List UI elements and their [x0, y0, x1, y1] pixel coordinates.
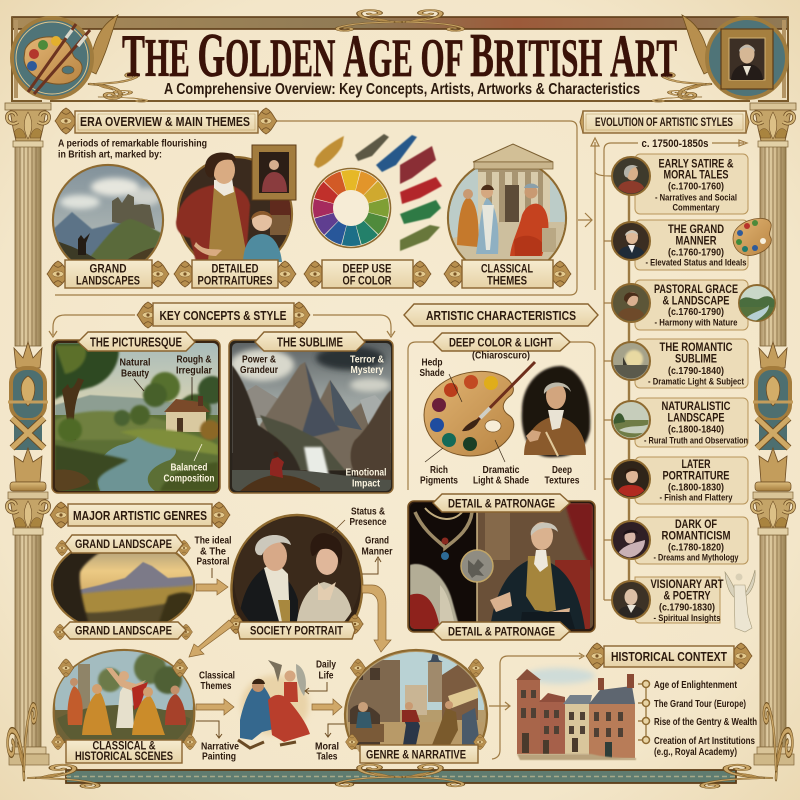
icon: left palette medallion: [12, 18, 92, 98]
heading: key concepts: [137, 302, 310, 328]
banner: the sublime: [255, 332, 365, 351]
style: early satire: EARLY SATIRE &: [658, 156, 734, 170]
annotation: emotional impact: [346, 468, 387, 490]
annotation: classical themes: [199, 670, 235, 692]
style: pastoral grace: - Harmony with Nature: [654, 318, 738, 328]
annotation: rough and irregular: Rough &: [176, 354, 212, 366]
style: dark of romanticism: DARK OF: [675, 517, 717, 531]
style: early satire: MORAL TALES: [664, 168, 729, 182]
style: romantic sublime: THE ROMANTIC: [660, 340, 733, 354]
style: grand manner: - Elevated Status and Ideals: [646, 258, 746, 268]
banner: deep use of color: OF COLOR: [342, 276, 392, 288]
style: later portraiture: PORTRAITURE: [662, 468, 730, 482]
annotation: ideal and pastoral: The ideal: [194, 536, 232, 546]
list: context timeline: Creation of Art Institutions: [654, 735, 755, 747]
banner: classical and historical scenes: [66, 740, 182, 763]
portrait: grand manner: [612, 222, 650, 260]
banner: grand landscapes: [47, 260, 169, 288]
style: romantic sublime: [635, 339, 748, 388]
arrow: portrait to genre: [362, 585, 391, 652]
annotation: power and grandeur: Grandeur: [240, 365, 278, 376]
style: naturalistic landscape: LANDSCAPE: [668, 410, 725, 424]
date range: c. 17500-1850s: [642, 138, 708, 150]
icon: framed portrait medallion: [707, 18, 787, 98]
annotation: narrative painting: Narrative: [201, 742, 239, 752]
banner: classical themes: CLASSICAL: [481, 264, 533, 276]
annotation: rich pigments: Pigments: [420, 476, 458, 486]
annotation: emotional impact: Emotional: [346, 468, 387, 478]
annotation: daily life: [305, 660, 336, 694]
style: grand manner: [635, 220, 748, 270]
list: context timeline: Rise of the Gentry & Wealth: [654, 716, 757, 728]
genre: society portrait: [228, 515, 363, 639]
heading: historical context: [586, 643, 752, 669]
list: context timeline: The Grand Tour (Europe): [654, 698, 746, 710]
style: grand manner: THE GRAND: [668, 222, 724, 236]
style: pastoral grace: PASTORAL GRACE: [654, 282, 738, 296]
annotation: rich pigments: Rich: [430, 465, 448, 476]
annotation: natural beauty: [120, 358, 151, 391]
annotation: hedp shade: [420, 358, 445, 379]
intro text: A periods of remarkable flourishing: [58, 138, 207, 150]
annotation: terror and mystery: Mystery: [350, 365, 384, 376]
style: visionary art: VISIONARY ART: [650, 577, 724, 591]
picture: the sublime: [229, 340, 393, 493]
vignette: naturalistic landscape: [612, 401, 650, 440]
style: naturalistic landscape: NATURALISTIC: [662, 399, 731, 413]
banner: the picturesque: THE PICTURESQUE: [90, 336, 182, 350]
style: pastoral grace: [635, 280, 748, 330]
annotation: ideal and pastoral: Pastoral: [196, 556, 230, 568]
banner: deep use of color: DEEP USE: [342, 264, 392, 276]
panel: evolution of artistic styles: [580, 111, 775, 632]
arrow: genre to context: [489, 702, 510, 710]
style: grand manner: (c.1760-1790): [668, 248, 724, 258]
annotation: dramatic light: Light & Shade: [473, 476, 529, 486]
annotation: power and grandeur: Power &: [242, 354, 276, 366]
annotation: power and grandeur: [240, 354, 278, 376]
portrait: dark of romanticism: [612, 521, 650, 559]
style: romantic sublime: (c.1790-1840): [668, 366, 724, 377]
banner: detailed portraitures: PORTRAITURES: [198, 276, 273, 288]
list: context timeline: [638, 679, 757, 758]
annotation: grand manner: Manner: [362, 546, 393, 558]
annotation: status and presence: Status &: [351, 506, 385, 518]
annotation: grand manner: Grand: [365, 536, 389, 546]
annotation: moral tales: Tales: [316, 752, 338, 762]
annotation: moral tales: [315, 724, 345, 762]
heading: era overview: [55, 108, 277, 134]
portrait: early satire: [612, 157, 650, 195]
annotation: terror and mystery: Terror &: [350, 354, 384, 366]
decorative frame top band: [12, 17, 788, 101]
portrait: artist: [522, 366, 590, 457]
annotation: balanced composition: Composition: [164, 474, 215, 484]
list: context timeline: (e.g., Royal Academy): [654, 746, 737, 758]
title: THE GOLDEN AGE OF BRITISH ART: [122, 22, 677, 90]
portrait: visionary art: [612, 581, 650, 619]
corner ornament: bottom right: [702, 705, 792, 788]
illustration: allegorical figures: [238, 660, 310, 748]
banner: detail and patronage bottom: DETAIL & PATRONAGE: [448, 624, 555, 638]
banner: grand landscape bottom: [62, 622, 186, 639]
intro text: in British art, marked by:: [58, 150, 162, 160]
arrow: era to evolution: [578, 213, 592, 227]
banner: society portrait: SOCIETY PORTRAIT: [250, 624, 344, 638]
corner ornament: bottom left: [8, 705, 98, 788]
illustration: georgian buildings: [516, 668, 636, 760]
heading: evolution: [580, 111, 749, 133]
heading: major artistic genres: [50, 502, 230, 528]
annotation: deep textures: Textures: [544, 476, 580, 486]
picture: the picturesque: [52, 340, 226, 493]
annotation: hedp shade: Shade: [420, 368, 445, 379]
banner: detailed portraitures: [174, 260, 296, 288]
arrow: portrait to classical: [189, 620, 234, 657]
style: romantic sublime: - Dramatic Light & Subject: [648, 376, 745, 388]
genre: classical and historical scenes: [51, 650, 197, 763]
style: romantic sublime: SUBLIME: [675, 352, 717, 366]
portrait: later portraiture: [612, 460, 650, 498]
paint strokes: [314, 134, 442, 251]
banner: detail and patronage bottom: [433, 622, 570, 640]
annotation: classical themes: Classical: [199, 670, 235, 682]
annotation: status and presence: [332, 506, 387, 533]
annotation: dramatic light: [473, 465, 529, 486]
annotation: narrative painting: Painting: [202, 752, 236, 762]
banner: grand landscape top: GRAND LANDSCAPE: [75, 537, 172, 551]
panel: major artistic genres: [50, 502, 487, 763]
style: pastoral grace: (c.1760-1790): [668, 307, 724, 318]
annotation: hedp shade: Hedp: [422, 358, 443, 368]
heading: key concepts: KEY CONCEPTS & STYLE: [160, 308, 287, 323]
banner: grand landscapes: GRAND: [90, 264, 126, 276]
sub-panel: deep color and light: [408, 333, 595, 490]
heading: artistic characteristics: [404, 304, 598, 326]
annotation: deep textures: Deep: [552, 465, 572, 476]
annotation: ideal and pastoral: [194, 536, 232, 578]
banner: the sublime: THE SUBLIME: [277, 336, 343, 350]
annotation: natural beauty: Natural: [120, 358, 151, 368]
banner: genre and narrative: GENRE & NARRATIVE: [366, 748, 466, 762]
banner: classical and historical scenes: HISTORICAL SCENES: [75, 751, 173, 763]
arrow: classical to figures: [196, 699, 234, 715]
theme: detailed portraitures: [176, 145, 300, 271]
annotation: moral tales: Moral: [315, 742, 339, 752]
style: grand manner: MANNER: [676, 234, 717, 248]
banner: detail and patronage top: DETAIL & PATRONAGE: [448, 496, 555, 510]
style: early satire: - Narratives and Social: [655, 192, 737, 204]
panel: era overview and main themes: [47, 108, 577, 295]
inset framed portrait: [252, 145, 296, 200]
icon: angel figure: [725, 570, 755, 632]
column: right: [750, 103, 796, 765]
decorative frame bottom band: [66, 765, 736, 786]
annotation: natural beauty: Beauty: [121, 368, 149, 380]
annotation: classical themes: Themes: [200, 681, 232, 692]
banner: grand landscape bottom: GRAND LANDSCAPE: [75, 624, 172, 638]
chart: colour wheel: [311, 168, 391, 248]
annotation: daily life: Life: [318, 670, 334, 682]
style: visionary art: - Spiritual Insights: [654, 613, 720, 624]
theme: grand landscapes: [52, 164, 164, 260]
annotation: terror and mystery: [350, 354, 384, 376]
banner: detailed portraitures: DETAILED: [212, 264, 258, 276]
style: naturalistic landscape: [635, 398, 748, 447]
annotation: balanced composition: [164, 444, 215, 484]
sub-panel: detail and patronage: [408, 494, 595, 640]
style: later portraiture: [635, 457, 748, 504]
style: naturalistic landscape: - Rural Truth and Observation: [644, 436, 748, 446]
banner: deep color: DEEP COLOR & LIGHT: [449, 336, 554, 350]
subtitle: A Comprehensive Overview: Key Concepts, Artists, Artworks & Characteristics: [164, 81, 640, 98]
style: dark of romanticism: [635, 517, 748, 564]
banner: classical themes: [444, 260, 571, 288]
style: dark of romanticism: - Dreams and Mythology: [654, 552, 739, 564]
style: dark of romanticism: (c.1780-1820): [668, 542, 724, 554]
panel: key concepts and style: [49, 302, 395, 493]
sub-panel: deep color and light: (Chiaroscuro): [472, 350, 530, 362]
icon: artist palette: [424, 362, 535, 462]
banner: the picturesque: [78, 332, 195, 351]
annotation: dramatic light: Dramatic: [482, 465, 520, 476]
list: context timeline: Age of Enlightenment: [654, 679, 737, 691]
annotation: deep textures: [544, 465, 580, 486]
banner: deep color: [433, 333, 570, 351]
annotation: rich pigments: [420, 465, 458, 486]
heading: artistic characteristics: ARTISTIC CHARACTERISTICS: [426, 308, 576, 323]
style: pastoral grace: & LANDSCAPE: [662, 294, 730, 308]
panel: artistic characteristics: [404, 304, 598, 640]
vignette: romantic sublime: [612, 342, 650, 381]
banner: deep use of color: [304, 260, 431, 288]
banner: grand landscapes: LANDSCAPES: [76, 276, 140, 288]
heading: evolution: EVOLUTION OF ARTISTIC STYLES: [595, 117, 733, 129]
banner: genre and narrative: [360, 745, 478, 763]
annotation: rough and irregular: Irregular: [176, 366, 212, 376]
style: early satire: [635, 154, 748, 214]
panel: historical context: [489, 643, 757, 760]
annotation: balanced composition: Balanced: [170, 462, 208, 474]
style: visionary art: & POETRY: [664, 588, 711, 602]
arrow: figures to genre: [312, 699, 342, 715]
heading: era overview: ERA OVERVIEW & MAIN THEMES: [80, 114, 250, 129]
banner: detail and patronage top: [433, 494, 570, 512]
heading: historical context: HISTORICAL CONTEXT: [611, 649, 727, 664]
annotation: rough and irregular: [176, 354, 212, 400]
arrow: landscape to portrait: [196, 579, 228, 595]
portrait: pastoral grace: [612, 284, 650, 322]
banner: classical and historical scenes: CLASSICAL &: [92, 740, 156, 752]
icon: small palette: [733, 218, 771, 256]
banner: classical themes: THEMES: [487, 276, 527, 288]
annotation: grand manner: [362, 536, 393, 574]
annotation: emotional impact: Impact: [352, 478, 381, 490]
genre: genre and narrative: [345, 645, 487, 763]
icon: landscape vignette: [739, 285, 775, 322]
style: later portraiture: - Finish and Flattery: [660, 492, 733, 504]
style: naturalistic landscape: (c.1800-1840): [668, 424, 724, 436]
style: later portraiture: LATER: [682, 457, 711, 471]
header scrollwork: [88, 10, 712, 102]
annotation: status and presence: Presence: [350, 517, 387, 528]
theme: classical themes: [446, 144, 568, 260]
style: visionary art: [635, 577, 724, 624]
column: left: [5, 103, 51, 765]
style: dark of romanticism: ROMANTICISM: [662, 528, 731, 542]
annotation: ideal and pastoral: & The: [200, 546, 226, 558]
style: later portraiture: (c.1800-1830): [668, 482, 724, 494]
style: early satire: Commentary: [672, 202, 720, 214]
banner: grand landscape top: [65, 535, 183, 553]
style: visionary art: (c.1790-1830): [659, 602, 715, 614]
heading: major artistic genres: MAJOR ARTISTIC GENRES: [73, 508, 207, 523]
intro text: [58, 138, 207, 160]
style: early satire: (c.1700-1760): [668, 182, 724, 192]
annotation: daily life: Daily: [316, 660, 336, 670]
annotation: narrative painting: [196, 721, 239, 762]
genre: grand landscape: [50, 535, 196, 640]
